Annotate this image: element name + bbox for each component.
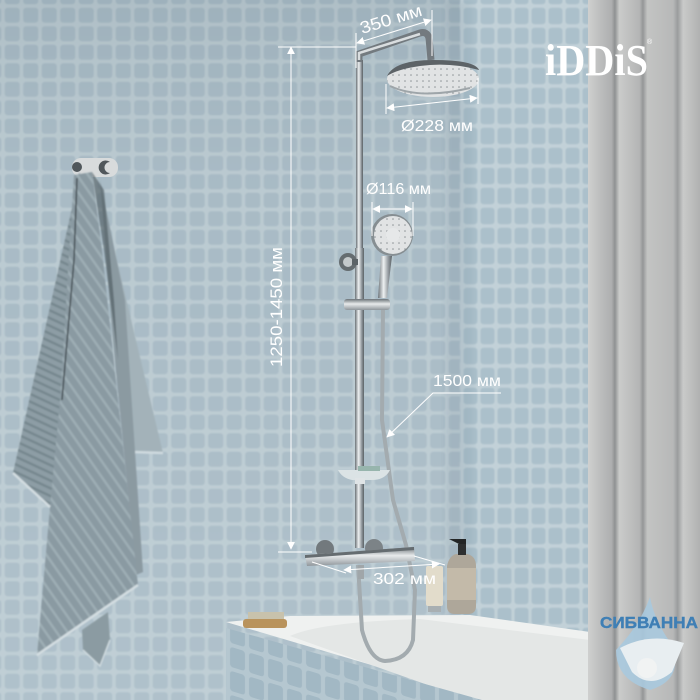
dimension: arm length bbox=[356, 1, 432, 68]
riser pipe bbox=[356, 60, 363, 250]
curtain bbox=[588, 0, 700, 700]
thermostatic mixer bbox=[305, 539, 415, 579]
slide holder bbox=[344, 299, 390, 310]
wall: left tiled wall bbox=[0, 0, 462, 700]
towel bbox=[13, 172, 163, 666]
dimension: arm length: 350 мм bbox=[358, 1, 424, 38]
shower hose bbox=[358, 305, 415, 661]
hand shower bbox=[371, 214, 413, 298]
wall: right tiled wall bbox=[445, 0, 594, 700]
towel hook bbox=[72, 158, 118, 177]
dimension: hand shower diameter bbox=[366, 181, 431, 236]
watermark: СИБВАННА: СИБВАННА bbox=[600, 615, 698, 632]
dimension: hand shower diameter: Ø116 мм bbox=[366, 181, 431, 198]
shower column bbox=[305, 33, 479, 579]
bath front tiled panel bbox=[226, 628, 482, 700]
dimension: mixer width: 302 мм bbox=[373, 571, 436, 588]
dimension: hose length: 1500 мм bbox=[433, 373, 501, 390]
dimension: mixer width bbox=[312, 556, 445, 588]
logo: IDDIS: ® bbox=[647, 38, 653, 46]
wall bracket bbox=[339, 253, 358, 271]
soap bottle bbox=[447, 539, 476, 614]
dimension: hose length bbox=[387, 373, 501, 437]
overhead arm bbox=[359, 33, 431, 62]
rain shower head bbox=[387, 60, 479, 97]
dimension: rain head diameter: Ø228 мм bbox=[401, 118, 473, 135]
dimension: rain head diameter bbox=[386, 78, 478, 135]
bath tub bbox=[226, 615, 590, 700]
watermark: СИБВАННА bbox=[600, 597, 698, 690]
scrub brush bbox=[243, 612, 287, 628]
dimension: column height: 1250-1450 мм bbox=[267, 247, 286, 367]
soap dish bbox=[338, 466, 390, 484]
logo: IDDIS: iDDiS bbox=[545, 36, 648, 85]
cream tube bbox=[426, 566, 443, 612]
